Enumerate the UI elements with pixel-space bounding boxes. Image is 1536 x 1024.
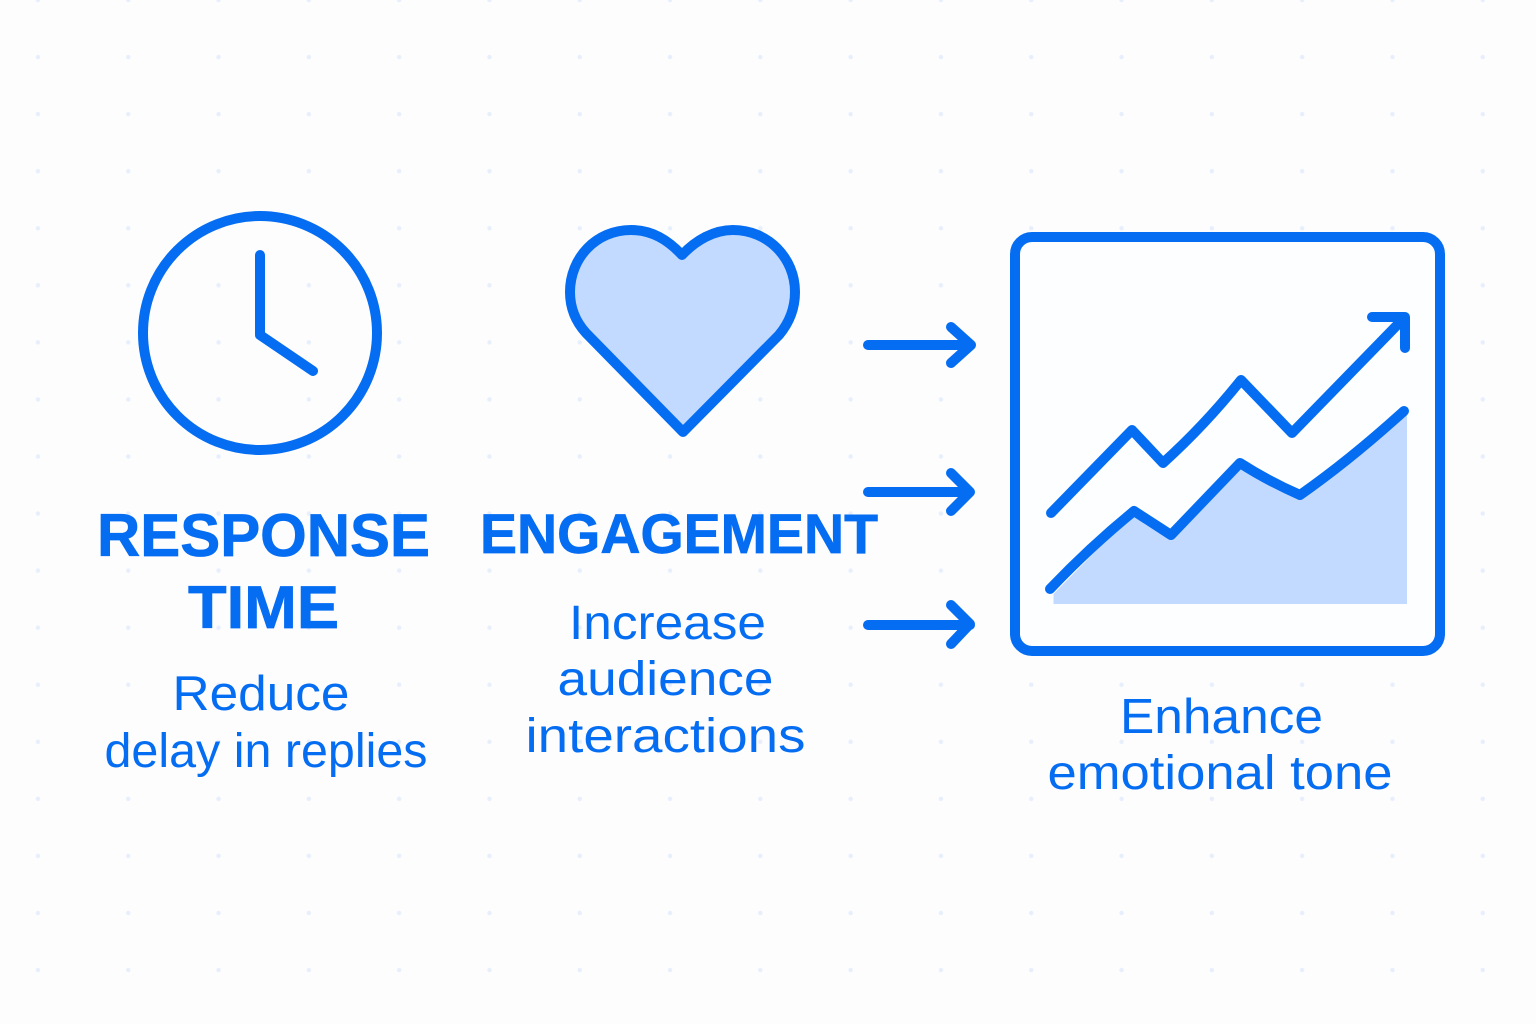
text: reduce delay in replies: delay in replies [104,725,428,778]
heading: response time [97,502,430,641]
chart lower line [1050,411,1404,589]
icon: heart [570,230,795,432]
heading: response time: TIME [188,574,339,641]
text: reduce delay in replies: Reduce [172,667,350,721]
text: enhance emotional tone [1048,690,1392,800]
arrow: bottom [868,605,970,644]
chart area fill [1054,414,1407,604]
text: increase audience interactions: Increase [569,597,766,650]
arrow: middle [868,473,970,511]
text: increase audience interactions: audience [558,653,774,706]
text: reduce delay in replies [104,667,428,778]
chart upper arrow line [1051,317,1405,513]
icon: growth chart [1015,237,1440,651]
heading: engagement: ENGAGEMENT [480,502,878,565]
text: enhance emotional tone: emotional tone [1048,747,1392,800]
text: enhance emotional tone: Enhance [1120,690,1323,744]
heading: response time: RESPONSE [97,502,430,569]
chart frame [1015,237,1440,651]
text: increase audience interactions: interactions [526,710,806,763]
icon: clock [143,216,377,450]
arrow: top [868,327,971,363]
text: increase audience interactions [526,597,806,763]
